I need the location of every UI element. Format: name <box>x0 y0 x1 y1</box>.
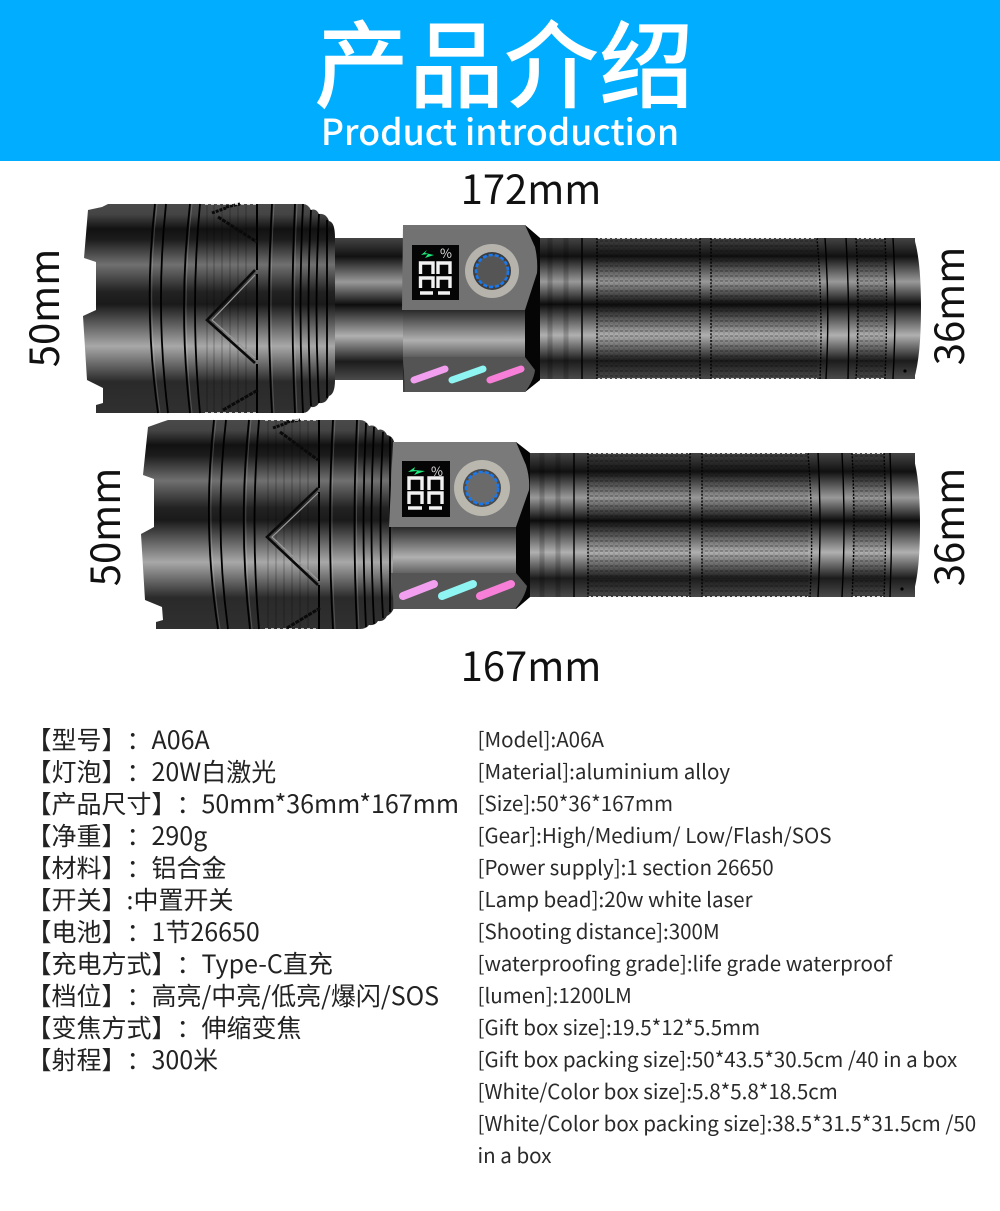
flashlight 2 <box>141 420 920 629</box>
switch housing <box>389 442 530 609</box>
specifications in Chinese: 【变焦方式】：伸缩变焦 <box>26 1009 302 1045</box>
specifications in Chinese: 【净重】：290g <box>26 817 207 853</box>
dimension: 167mm: 167mm <box>461 635 601 693</box>
battery display <box>402 461 450 517</box>
dimension: tail 36mm lower: 36mm <box>918 468 976 586</box>
specifications in English <box>478 723 976 1169</box>
specifications in Chinese: 【材料】：铝合金 <box>26 849 227 885</box>
header banner <box>0 0 1000 161</box>
specifications in English: [Power supply]:1 section 26650 <box>478 851 774 881</box>
switch housing <box>402 225 540 392</box>
battery display <box>412 243 459 300</box>
specifications in Chinese: 【型号】：A06A <box>26 721 210 757</box>
body tube <box>520 453 920 597</box>
specifications in English: [Shooting distance]:300M <box>478 915 720 945</box>
specifications in English: [Gift box packing size]:50*43.5*30.5cm /40 in a box <box>478 1043 957 1073</box>
specifications in English: [Model]:A06A <box>478 723 604 753</box>
dimension: head 50mm upper: 50mm <box>13 249 71 367</box>
specifications in Chinese: 【档位】：高亮/中亮/低亮/爆闪/SOS <box>26 977 439 1013</box>
battery display: % <box>431 461 443 480</box>
battery display: % <box>440 243 452 262</box>
specifications in Chinese: 【灯泡】：20W白激光 <box>26 753 276 789</box>
indicator stripes <box>403 584 511 596</box>
specifications in English: [Material]:aluminium alloy <box>478 755 730 785</box>
dimension: head 50mm lower: 50mm <box>74 468 132 586</box>
specifications in English: [lumen]:1200LM <box>478 979 632 1009</box>
specifications in English: [Gift box size]:19.5*12*5.5mm <box>478 1011 760 1041</box>
subtitle: Product introduction <box>321 105 679 156</box>
flashlight dimension diagram <box>13 161 976 693</box>
body tube <box>327 238 921 380</box>
specifications in English: [White/Color box packing size]:38.5*31.5*31.5cm /50 <box>478 1107 976 1137</box>
specifications in Chinese <box>26 721 459 1077</box>
indicator stripes <box>414 369 521 380</box>
specifications in English: [waterproofing grade]:life grade waterproof <box>478 947 892 977</box>
specifications in Chinese: 【开关】:中置开关 <box>26 881 233 917</box>
flashlight 1 <box>83 204 921 413</box>
head <box>83 204 335 413</box>
specifications in Chinese: 【产品尺寸】：50mm*36mm*167mm <box>26 785 459 821</box>
specifications in English: in a box <box>478 1139 551 1169</box>
specifications in English: [Gear]:High/Medium/ Low/Flash/SOS <box>478 819 831 849</box>
specifications in English: [Lamp bead]:20w white laser <box>478 883 753 913</box>
head <box>141 420 395 629</box>
specifications in Chinese: 【充电方式】：Type-C直充 <box>26 945 333 981</box>
specifications in English: [White/Color box size]:5.8*5.8*18.5cm <box>478 1075 838 1105</box>
specifications in Chinese: 【电池】：1节26650 <box>26 913 260 949</box>
specifications in Chinese: 【射程】：300米 <box>26 1041 218 1077</box>
dimension: tail 36mm upper: 36mm <box>918 247 976 365</box>
power button <box>454 460 510 516</box>
power button <box>465 244 519 298</box>
specifications in English: [Size]:50*36*167mm <box>478 787 673 817</box>
